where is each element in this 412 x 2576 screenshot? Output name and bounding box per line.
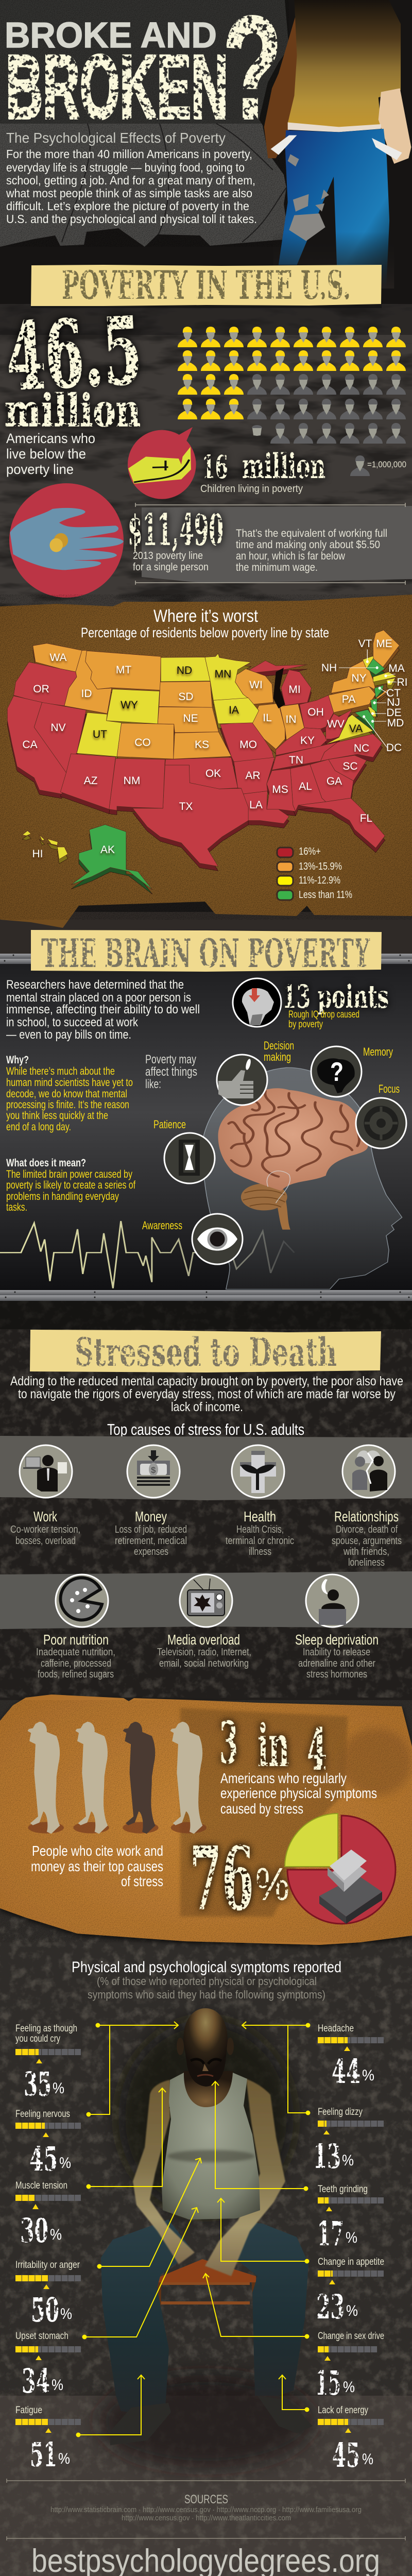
- cause: relationships: [332, 1445, 402, 1568]
- cause: health: terminal or chronic: [226, 1535, 294, 1547]
- map legend: 11%-12.9%: [299, 875, 340, 886]
- icon: head with down arrow: [233, 978, 281, 1027]
- text: stress intro: [10, 1374, 403, 1414]
- stat: 3 in 4: Americans who regularly: [220, 1770, 347, 1786]
- state labels: NC: [354, 742, 369, 754]
- metal rails: section divider: [0, 1290, 412, 1301]
- state labels: AR: [245, 770, 261, 782]
- symptom: lack of energy: 45: [332, 2436, 360, 2475]
- symptom: change in sex drive: 15: [315, 2364, 341, 2403]
- state labels: VA: [349, 723, 363, 735]
- state labels: NY: [351, 672, 367, 684]
- cause: health: Health Crisis,: [236, 1524, 284, 1535]
- grey bands: [0, 1436, 412, 1629]
- state labels: NV: [50, 722, 66, 734]
- stat: poverty line $11,490: 2013 poverty line: [133, 550, 203, 562]
- icon: decision making: making: [264, 1050, 291, 1063]
- title: BROKEN: [6, 37, 228, 138]
- state labels: AZ: [84, 775, 98, 787]
- symptom: feeling as though you could cry: Feeling as though: [15, 2023, 77, 2034]
- jeans: [101, 2219, 308, 2416]
- symptom: teeth grinding: [317, 2184, 384, 2253]
- stat: 76 percent: %: [255, 1859, 289, 1910]
- map legend: [277, 846, 352, 901]
- symptom: feeling dizzy: [313, 2107, 384, 2176]
- symptom: change in appetite: [316, 2257, 384, 2327]
- map heading: [81, 606, 329, 640]
- text: what does it mean: tasks.: [6, 1201, 27, 1213]
- head: [177, 2008, 234, 2087]
- state labels: NJ: [387, 697, 400, 708]
- text: poverty may affect things like: affect things: [145, 1065, 197, 1079]
- text: brain intro: — even to pay bills on time.: [6, 1028, 131, 1042]
- intro text: U.S. and the psychological and physical toll it takes.: [6, 212, 257, 226]
- state labels: NM: [124, 775, 140, 787]
- cause: sleep deprivation: Inability to release: [303, 1647, 370, 1658]
- symptom: change in sex drive: [315, 2331, 384, 2403]
- symptom: upset stomach: Upset stomach: [15, 2331, 68, 2342]
- state labels: AK: [100, 844, 115, 856]
- icon: decision making: Decision: [264, 1039, 294, 1052]
- icon: memory: Memory: [363, 1045, 393, 1058]
- map heading: Percentage of residents below poverty line by state: [81, 625, 329, 640]
- stat: 3 in 4: experience physical symptoms: [220, 1785, 377, 1801]
- state labels: MS: [272, 784, 288, 795]
- state labels: UT: [93, 728, 107, 740]
- state labels: MN: [215, 668, 231, 680]
- arrows: symptom connectors: [76, 2022, 310, 2437]
- symptom: change in sex drive: %: [343, 2379, 355, 2396]
- heart rate line: [0, 1221, 294, 1288]
- silhouettes: three in four people: [28, 1722, 207, 1834]
- state labels: HI: [32, 848, 43, 860]
- state labels: DC: [386, 742, 402, 754]
- stat: 13 points: [282, 978, 389, 1030]
- symptom: feeling as though you could cry: [15, 2023, 81, 2104]
- stat: 3 in 4: 3: [219, 1709, 238, 1777]
- cause: work: Work: [33, 1509, 58, 1524]
- text: why: end of a long day.: [6, 1121, 71, 1133]
- symptom: teeth grinding: 17: [317, 2214, 344, 2253]
- legend: one icon equals one million: =1,000,000: [367, 460, 406, 469]
- icon: patience: Patience: [153, 1118, 186, 1131]
- state labels: IL: [263, 712, 272, 724]
- cause: media overload: Television, radio, Internet,: [157, 1647, 251, 1658]
- state labels: WI: [249, 679, 263, 691]
- symptom: lack of energy: %: [362, 2451, 373, 2468]
- state labels: OR: [33, 683, 49, 695]
- symptom: headache: 44: [332, 2052, 360, 2091]
- symptom: change in appetite: %: [346, 2302, 358, 2319]
- icon: awareness: Awareness: [142, 1219, 182, 1232]
- intro text: difficult. Let’s explore the picture of poverty in the: [6, 199, 249, 213]
- text: $11,490: [128, 504, 224, 555]
- state labels: MD: [387, 717, 404, 729]
- state labels: CT: [386, 687, 401, 699]
- map legend: Less than 11%: [299, 889, 352, 901]
- state labels: SD: [178, 691, 194, 703]
- sources: [50, 2493, 362, 2522]
- illustration: man with empty pockets: [264, 0, 411, 289]
- chair: [155, 2259, 256, 2339]
- illustration: seated man: [98, 2008, 314, 2468]
- icon: briefcase of money: [319, 1850, 382, 1924]
- text: why: you think less quickly at the: [6, 1110, 108, 1122]
- state labels: VT: [358, 638, 372, 650]
- state labels: TN: [289, 754, 303, 766]
- state labels: PA: [342, 693, 355, 705]
- panel: orange torn paper: [0, 1694, 412, 1945]
- stat: 13 points: by poverty: [288, 1019, 323, 1030]
- symptom: change in sex drive: Change in sex drive: [318, 2331, 384, 2342]
- symptom: muscle tension: %: [50, 2226, 62, 2243]
- text: minimum wage comparison: That’s the equivalent of working full: [236, 528, 387, 539]
- state labels: SC: [342, 760, 358, 772]
- stat: 76 percent: 76: [190, 1827, 254, 1930]
- cause: poor nutrition: caffeine, processed: [41, 1658, 111, 1669]
- stat: 76 percent: money as their top causes: [31, 1858, 163, 1874]
- text: why: human mind scientists have yet to: [6, 1077, 133, 1089]
- heading: symptoms: (% of those who reported physical or psychological: [97, 1975, 317, 1988]
- symptom: irritability or anger: [15, 2260, 81, 2330]
- state labels: MO: [239, 739, 257, 751]
- map legend: 13%-15.9%: [299, 861, 342, 872]
- icon: speech bubble with child hand: [128, 427, 196, 499]
- symptom: headache: %: [362, 2067, 374, 2084]
- state labels: DE: [386, 707, 402, 719]
- text: brain intro: in school, to succeed at work: [6, 1015, 139, 1029]
- state labels: AL: [299, 781, 312, 792]
- cause: relationships: Divorce, death of: [336, 1524, 398, 1535]
- symptom: feeling as though you could cry: you could cry: [15, 2033, 60, 2044]
- cause: money: Money: [135, 1509, 167, 1524]
- cause: poor nutrition: [36, 1574, 115, 1680]
- symptom: feeling as though you could cry: 35: [24, 2065, 52, 2104]
- symptom: feeling nervous: %: [59, 2155, 71, 2172]
- stat: 16 million children: 16: [202, 448, 228, 486]
- shoes: [110, 2396, 313, 2445]
- intro text: school, getting a job. And for a great many of them,: [6, 174, 255, 187]
- state labels: MA: [388, 663, 405, 674]
- state labels: OH: [307, 706, 324, 718]
- stat: 76 percent: People who cite work and: [32, 1843, 163, 1859]
- state pointer lines: [339, 649, 397, 748]
- symptom: lack of energy: [318, 2405, 384, 2475]
- icon: open hand with coins: [9, 483, 124, 598]
- pie chart: work and money: [285, 1814, 396, 1924]
- cause: money: [115, 1445, 187, 1557]
- heading: symptoms: [72, 1959, 341, 2001]
- symptom: muscle tension: Muscle tension: [15, 2180, 67, 2191]
- cause: poor nutrition: Inadequate nutrition,: [36, 1647, 115, 1658]
- stat: 16 million children: Children living in poverty: [200, 483, 303, 495]
- state labels: ID: [81, 688, 92, 700]
- arms: [133, 2079, 285, 2276]
- stat: 46.5 million: [4, 297, 144, 477]
- cause: health: Health: [244, 1509, 276, 1524]
- sources: http://www.census.gov · http://www.theatlanticcities.com: [122, 2514, 291, 2522]
- title: [5, 0, 282, 150]
- symptom: irritability or anger: %: [60, 2306, 72, 2323]
- state labels: FL: [360, 812, 372, 824]
- state labels: RI: [397, 676, 408, 688]
- brain: [218, 1088, 368, 1191]
- text: stress intro: lack of income.: [171, 1400, 243, 1414]
- text: what does it mean: problems in handling everyday: [6, 1191, 119, 1202]
- stat: 16 million children: [200, 446, 325, 495]
- symptom: feeling nervous: Feeling nervous: [15, 2109, 70, 2120]
- metal rails: brain section top: [0, 954, 412, 964]
- icon: focus: [356, 1082, 406, 1148]
- cause: sleep deprivation: Sleep deprivation: [295, 1632, 379, 1648]
- symptom: muscle tension: 30: [20, 2211, 48, 2250]
- pictogram: people in poverty: [178, 327, 406, 444]
- cause: health: [226, 1445, 294, 1557]
- state labels: NH: [321, 662, 337, 674]
- panel: torn brown paper: [0, 595, 412, 928]
- text: minimum wage comparison: [236, 528, 387, 573]
- intro text: [6, 130, 257, 226]
- tank top: [162, 2073, 260, 2219]
- legend: one icon equals one million: [350, 455, 406, 476]
- cause: sleep deprivation: adrenaline and other: [298, 1658, 375, 1669]
- state labels: GA: [327, 775, 342, 787]
- symptom: upset stomach: %: [52, 2377, 63, 2394]
- text: brain intro: [6, 978, 200, 1042]
- icon: patience: [153, 1118, 215, 1183]
- state labels: LA: [249, 799, 263, 811]
- text: brain intro: immense, affecting their ability to do well: [6, 1003, 200, 1016]
- symptom: headache: [318, 2023, 384, 2091]
- text: poverty may affect things like: like:: [145, 1077, 161, 1091]
- symptom: fatigue: [15, 2405, 81, 2475]
- stat: 46.5 million: 46.5: [4, 297, 144, 411]
- cause: relationships: loneliness: [348, 1557, 385, 1568]
- cause: work: bosses, overload: [15, 1535, 76, 1547]
- stat: 46.5 million: live below the: [6, 446, 86, 462]
- title: BROKE AND: [5, 15, 217, 55]
- cause: money: $: [151, 1465, 156, 1475]
- stat: 46.5 million: million: [5, 385, 141, 437]
- symptom: feeling as though you could cry: %: [53, 2080, 64, 2097]
- symptom: fatigue: %: [58, 2450, 70, 2467]
- stat: 3 in 4: caused by stress: [220, 1801, 303, 1817]
- symptom: upset stomach: [15, 2331, 81, 2401]
- symptom: lack of energy: Lack of energy: [318, 2405, 368, 2416]
- map: poverty rate by state: [7, 630, 400, 894]
- symptom: irritability or anger: 50: [31, 2291, 59, 2330]
- text: brain intro: Researchers have determined that the: [6, 978, 184, 992]
- map heading: Where it’s worst: [153, 606, 258, 626]
- cause: work: Co-worker tension,: [10, 1524, 80, 1535]
- footer dividers: [7, 2479, 405, 2540]
- heading: symptoms: symptoms who said they had the following symptoms): [88, 1988, 325, 2001]
- cause: media overload: email, social networking: [159, 1658, 249, 1669]
- symptom: muscle tension: [15, 2180, 81, 2250]
- cause: relationships: with friends,: [343, 1546, 389, 1557]
- state labels: MI: [288, 684, 301, 696]
- panel: grey brushstroke: [142, 506, 412, 583]
- state labels: IN: [285, 714, 297, 725]
- sources: http://www.statisticbrain.com · http://www.census.gov · http://www.nccp.org · http://www.familiesusa.org: [50, 2505, 362, 2514]
- stat: 76 percent: of stress: [121, 1873, 163, 1889]
- state labels: WA: [49, 652, 67, 664]
- intro text: The Psychological Effects of Poverty: [6, 130, 226, 146]
- symptom: feeling nervous: [15, 2109, 81, 2179]
- icon: memory: ?: [330, 1057, 344, 1087]
- stat: 46.5 million: poverty line: [6, 462, 74, 477]
- text: minimum wage comparison: the minimum wage.: [236, 562, 318, 573]
- intro text: For the more than 40 million Americans in poverty,: [6, 147, 252, 161]
- cause: sleep deprivation: [295, 1574, 379, 1680]
- symptom: feeling dizzy: 13: [313, 2137, 341, 2176]
- symptom: headache: Headache: [318, 2023, 354, 2034]
- state labels: ND: [177, 665, 192, 676]
- symptom: feeling dizzy: %: [342, 2152, 354, 2169]
- text: brain intro: mental strain placed on a poor person is: [6, 991, 191, 1005]
- symptom: upset stomach: 34: [22, 2362, 50, 2401]
- state labels: NE: [183, 713, 198, 724]
- illustration: transparent head and brain: [202, 1067, 402, 1289]
- text: what does it mean: poverty is likely to create a series of: [6, 1179, 135, 1191]
- text: why: processing is finite. It’s the reason: [6, 1099, 129, 1111]
- state labels: IA: [229, 704, 239, 716]
- text: poverty may affect things like: [145, 1053, 197, 1091]
- text: what does it mean: The limited brain power caused by: [6, 1168, 132, 1180]
- cause: money: retirement, medical: [115, 1535, 187, 1547]
- stat: poverty line $11,490: [128, 504, 224, 573]
- concrete chips: [288, 154, 329, 241]
- text: what does it mean: [6, 1157, 135, 1213]
- icon: awareness: [142, 1214, 243, 1264]
- heading: symptoms: Physical and psychological symptoms reported: [72, 1959, 341, 1976]
- symptom: teeth grinding: %: [346, 2229, 357, 2246]
- cause: media overload: Media overload: [167, 1632, 240, 1648]
- intro text: everyday life is a struggle — buying food, going to: [6, 161, 245, 174]
- cause: money: Loss of job, reduced: [115, 1524, 187, 1535]
- symptom: change in appetite: Change in appetite: [318, 2257, 384, 2267]
- state labels: ME: [376, 638, 392, 650]
- neck and chest: [169, 2071, 243, 2111]
- cause: poor nutrition: foods, refined sugars: [38, 1669, 114, 1680]
- cause: money: expenses: [134, 1546, 168, 1557]
- heading: top causes: Top causes of stress for U.S. adults: [107, 1420, 304, 1438]
- divider: [135, 503, 405, 585]
- state labels: CA: [22, 739, 38, 751]
- text: minimum wage comparison: time and making only about $5.50: [236, 539, 380, 551]
- cause: health: illness: [249, 1546, 271, 1557]
- symptom: feeling nervous: 45: [29, 2140, 58, 2179]
- symptom: fatigue: Fatigue: [15, 2405, 42, 2416]
- state labels: WV: [327, 718, 345, 730]
- stat: 3 in 4: [219, 1709, 377, 1817]
- state labels: MT: [116, 664, 131, 676]
- state labels: KS: [195, 739, 209, 751]
- text: why: decode, we do know that mental: [6, 1088, 127, 1100]
- state labels: [22, 638, 408, 860]
- text: what does it mean: What does it mean?: [6, 1157, 86, 1169]
- symptom: fatigue: 51: [30, 2435, 57, 2475]
- symptom: teeth grinding: Teeth grinding: [318, 2184, 368, 2195]
- stat: 46.5 million: Americans who: [6, 431, 95, 446]
- state labels: CO: [134, 737, 151, 749]
- cause: work: [10, 1445, 80, 1547]
- icon: memory: [311, 1045, 393, 1097]
- map legend: 16%+: [299, 846, 321, 857]
- state labels: WY: [121, 699, 138, 711]
- stat: poverty line $11,490: for a single person: [133, 562, 209, 573]
- state labels: KY: [300, 735, 315, 747]
- text: why: While there’s much about the: [6, 1065, 115, 1077]
- text: minimum wage comparison: an hour, which is far below: [236, 550, 346, 562]
- symptom: irritability or anger: Irritability or anger: [15, 2260, 80, 2270]
- text: why: Why?: [6, 1054, 29, 1066]
- sources: SOURCES: [184, 2493, 228, 2506]
- text: why: [6, 1054, 133, 1133]
- icon: decision making: [217, 1039, 294, 1105]
- state labels: OK: [205, 768, 221, 779]
- icon: focus: Focus: [379, 1082, 400, 1095]
- symptom: change in appetite: 23: [316, 2287, 345, 2327]
- cause: sleep deprivation: stress hormones: [306, 1669, 367, 1680]
- stat: 3 in 4: in: [258, 1713, 289, 1780]
- stat: 76 percent: [31, 1827, 289, 1930]
- cause: media overload: [157, 1574, 251, 1669]
- text: poverty may affect things like: Poverty may: [145, 1053, 196, 1066]
- cause: poor nutrition: Poor nutrition: [43, 1632, 109, 1648]
- state labels: TX: [179, 801, 193, 812]
- stat: 13 points: Rough IQ drop caused: [288, 1009, 359, 1020]
- stat: 3 in 4: 4: [307, 1716, 327, 1784]
- concrete slab: [0, 0, 289, 247]
- symptom: feeling dizzy: Feeling dizzy: [318, 2107, 363, 2117]
- stat: 16 million children: million: [242, 446, 325, 486]
- intro text: what most people think of as simple tasks are also: [6, 187, 252, 200]
